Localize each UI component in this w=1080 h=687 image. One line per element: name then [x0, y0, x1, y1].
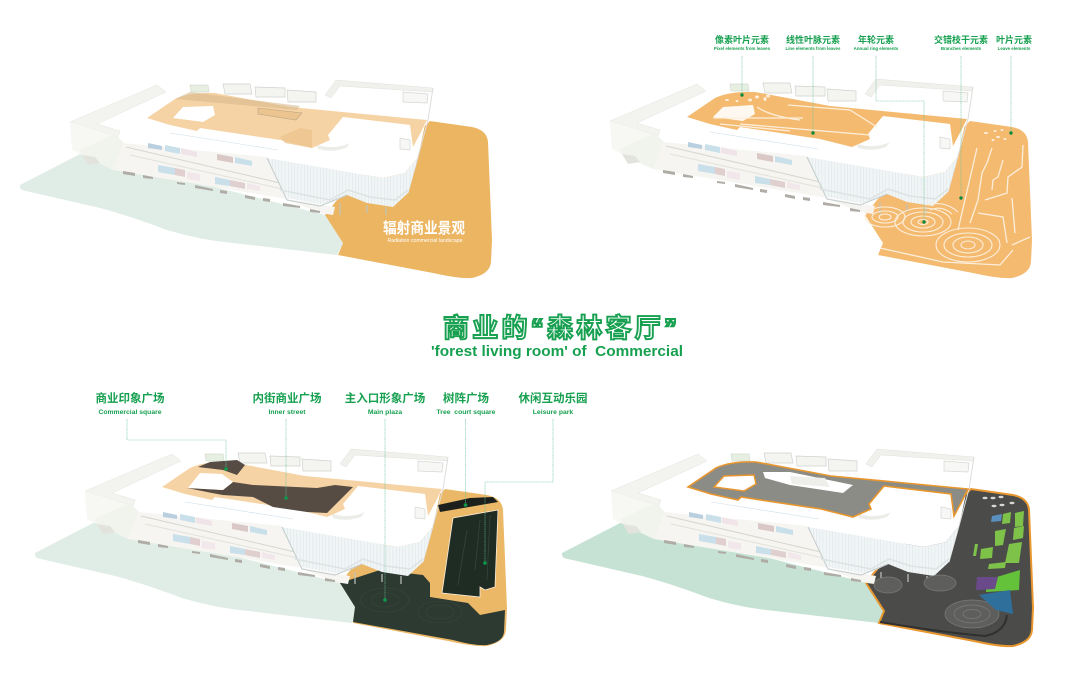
orange landscape ground: [340, 489, 507, 646]
label: leisure park: Leisure park: [533, 409, 573, 416]
label: commercial square: Commercial square: [98, 409, 162, 416]
label: line elements: Line elements from leaves: [786, 46, 841, 51]
label: leave elements: 叶片元素: [996, 34, 1032, 45]
inner street dark area: [187, 482, 353, 513]
green lawn area: [20, 153, 343, 255]
label: pixel elements: [714, 34, 771, 51]
green planting blocks: [973, 511, 1024, 592]
main plaza dark area: [340, 570, 505, 645]
label: branches elements: Branches elements: [941, 46, 982, 51]
label: branches elements: 交错枝干元素: [934, 34, 988, 45]
purple feature: [976, 577, 998, 590]
annual ring elements: [865, 204, 1000, 262]
label: annual ring elements: [854, 34, 899, 51]
water feature: [979, 590, 1013, 614]
roof orange band: [162, 462, 442, 517]
panel: design elements: [610, 34, 1032, 278]
landscape label: [383, 219, 465, 244]
label: line elements: [786, 34, 841, 51]
leaf elements: [984, 129, 1006, 141]
label: inner street: Inner street: [268, 409, 306, 416]
curved lower path: [880, 615, 1007, 636]
label: annual ring elements: Annual ring elements: [854, 46, 899, 51]
label: pixel elements: Pixel elements from leaves: [714, 46, 771, 51]
green lawn area: [35, 521, 358, 623]
building massing: [610, 79, 973, 214]
title: 'forest living room' of Commercial: [431, 344, 683, 360]
roof white block: [188, 473, 233, 490]
panel: radiation commercial landscape: [20, 80, 492, 278]
label: commercial square: [96, 391, 165, 416]
label: pixel elements: 像素叶片元素: [715, 34, 769, 45]
orange roof pattern: [687, 92, 967, 147]
leader lines and dots: [127, 419, 553, 602]
building massing: [85, 449, 448, 584]
panel: final masterplan: [562, 449, 1033, 646]
grey roof plan with orange outline: [688, 462, 968, 517]
orange roof landscape: [147, 92, 427, 148]
commercial square dark area: [198, 460, 245, 475]
label: tree court square: Tree court square: [437, 409, 496, 416]
label: commercial square: 商业印象广场: [96, 391, 165, 405]
leisure park paths: [458, 515, 490, 585]
leisure park: [442, 510, 498, 597]
label: inner street: [252, 391, 322, 416]
building massing: [611, 449, 974, 584]
branch elements: [880, 145, 1030, 265]
orange landscape ground with shapes: [865, 121, 1032, 278]
ring plazas: [874, 575, 999, 628]
tree court square: [438, 497, 498, 512]
label: inner street: 内街商业广场: [252, 391, 322, 405]
blue feature: [991, 514, 1002, 522]
title: 商业的“森林客厅”: [443, 313, 677, 343]
label: leave elements: [996, 34, 1032, 51]
label: main plaza: 主入口形象广场: [345, 391, 426, 405]
label: annual ring elements: 年轮元素: [858, 34, 894, 45]
panel: functional plazas: [35, 391, 588, 646]
label: tree court square: 树阵广场: [443, 391, 489, 405]
label: leave elements: Leave elements: [998, 46, 1031, 51]
dark ground with orange outline: [866, 489, 1033, 646]
label: leisure park: [518, 391, 588, 416]
leaf pavers: [982, 496, 1014, 507]
label: main plaza: Main plaza: [368, 409, 402, 416]
building massing: [70, 80, 433, 215]
label: branches elements: [934, 34, 988, 51]
label: tree court square: [437, 391, 496, 416]
label: main plaza: [345, 391, 426, 416]
rings in main plaza: [361, 588, 462, 623]
label: line elements: 线性叶脉元素: [786, 34, 840, 45]
orange landscape ground: [325, 121, 492, 278]
landscape label: Radiation commercial landscape: [388, 238, 463, 244]
label: leisure park: 休闲互动乐园: [518, 391, 588, 405]
landscape label: 辐射商业景观: [383, 219, 465, 237]
leader lines and dots: [740, 56, 1013, 224]
green lawn area: [562, 521, 885, 623]
title: [431, 313, 683, 360]
